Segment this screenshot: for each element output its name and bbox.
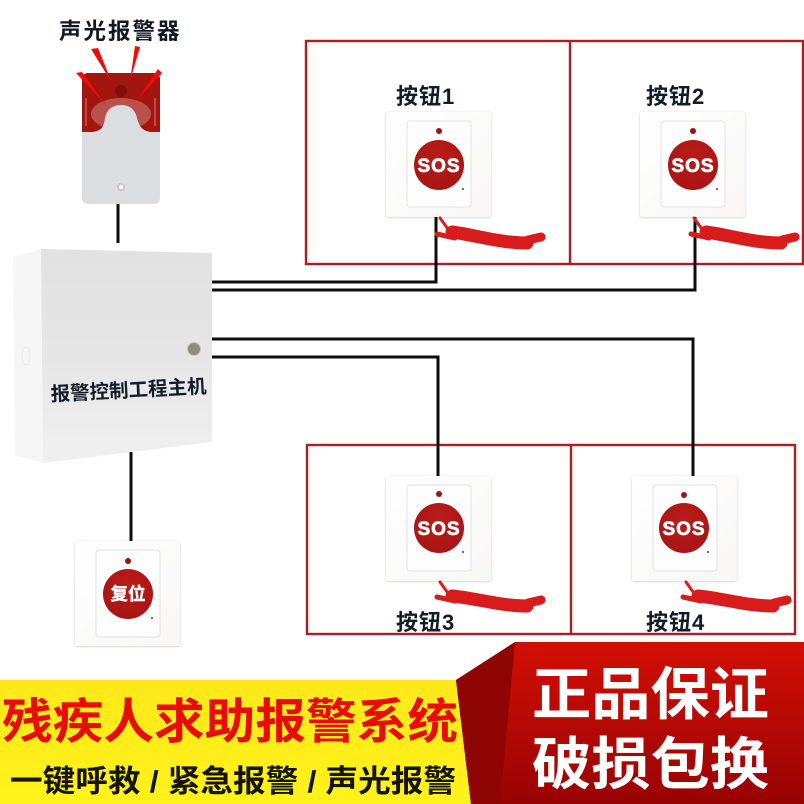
button 3: SOS bbox=[417, 519, 461, 540]
control host box bbox=[13, 249, 212, 463]
room frames: bottom bbox=[307, 445, 795, 634]
button 3 bbox=[386, 476, 491, 581]
rope 4 bbox=[683, 582, 787, 606]
rope 2 bbox=[691, 218, 795, 243]
button 1 bbox=[386, 112, 491, 217]
button 4 bbox=[632, 476, 737, 581]
button 1: SOS bbox=[417, 156, 461, 177]
reset button: 复位 bbox=[110, 584, 146, 604]
label: button 2: 按钮2 bbox=[646, 84, 705, 109]
reset button bbox=[75, 541, 180, 646]
button 2 bbox=[640, 112, 745, 217]
room frames: top bbox=[306, 41, 803, 264]
banner title: 残疾人求助报警系统 bbox=[2, 696, 458, 749]
banner: red guarantee panel bbox=[456, 642, 804, 804]
guarantee line 1: 正品保证 bbox=[532, 663, 769, 727]
label: button 1: 按钮1 bbox=[396, 84, 455, 109]
label: host: 报警控制工程主机 bbox=[50, 375, 208, 406]
label: 声光报警器: 声光报警器 bbox=[59, 19, 182, 44]
rope 3 bbox=[437, 582, 541, 606]
guarantee line 2: 破损包换 bbox=[532, 733, 769, 797]
wires from host to buttons bbox=[118, 204, 695, 542]
label: button 3: 按钮3 bbox=[396, 610, 455, 635]
icon: lock bbox=[188, 342, 200, 356]
icon: sound and light alarm bbox=[76, 46, 162, 204]
label: button 4: 按钮4 bbox=[646, 610, 705, 635]
button 4: SOS bbox=[662, 519, 706, 540]
button 2: SOS bbox=[671, 156, 715, 177]
banner: yellow title strip bbox=[0, 680, 471, 804]
rope 1 bbox=[437, 218, 541, 243]
banner subtitle: 一键呼救 / 紧急报警 / 声光报警 bbox=[10, 764, 456, 799]
